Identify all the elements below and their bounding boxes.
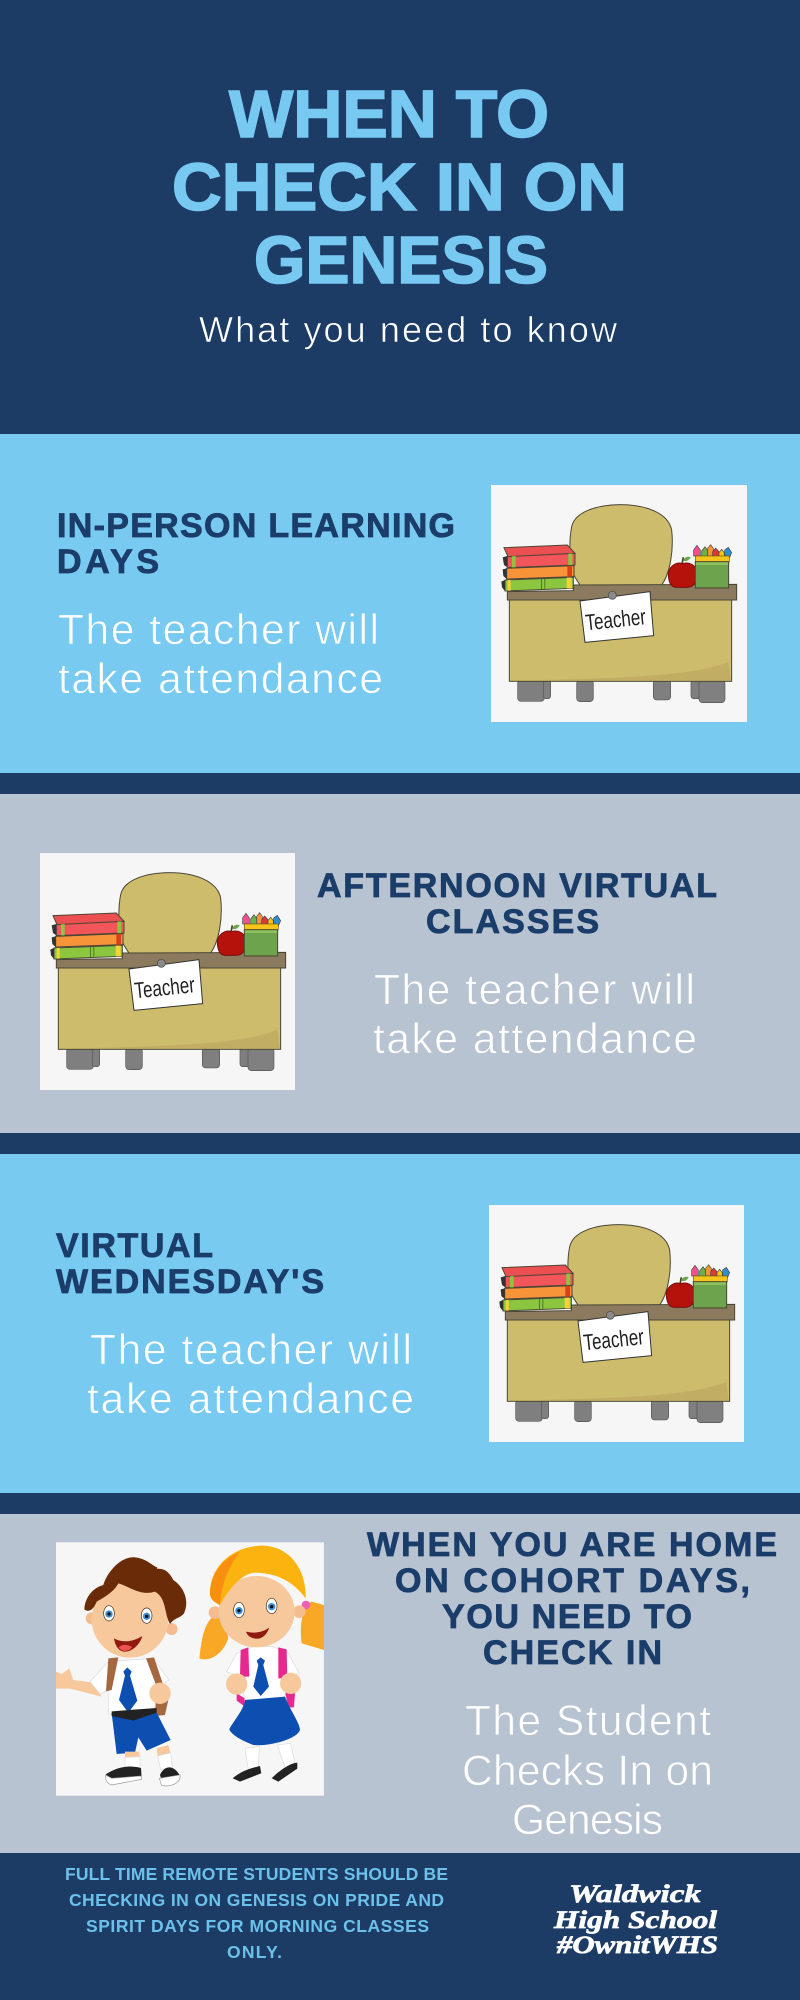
text: teacher takes attendance: take attendance [373,1016,697,1063]
heading: afternoon virtual classes: CLASSES [426,903,599,941]
heading: cohort days: YOU NEED TO [442,1598,692,1636]
heading: cohort days: ON COHORT DAYS, [395,1562,750,1600]
text: teacher takes attendance [373,967,697,1063]
title: WHEN TO [229,77,549,152]
heading: cohort days: CHECK IN [483,1634,662,1672]
heading: virtual wednesdays: WEDNESDAY'S [56,1263,324,1301]
heading: in-person learning days [57,507,455,581]
icon: two students [56,1542,324,1796]
text: teacher takes attendance [58,607,383,703]
divider band [0,1133,800,1154]
girl [199,1546,324,1782]
panel: afternoon virtual classes [0,794,800,1133]
note: full time remote students [65,1864,448,1962]
text: teacher takes attendance [87,1327,414,1423]
note: full time remote students: SPIRIT DAYS FOR MORNING CLASSES [86,1916,429,1936]
title [172,77,627,298]
title: GENESIS [254,223,548,298]
text: teacher takes attendance: The teacher will [58,607,379,654]
note: full time remote students: ONLY. [227,1942,282,1962]
school name and hashtag: #OwnitWHS [556,1932,718,1959]
icon: teacher desk: Teacher [584,603,647,635]
panel: footer [0,1853,800,2000]
text: student checks in: The Student [465,1698,711,1745]
icon: teacher desk: Teacher [133,971,196,1003]
text: teacher takes attendance: The teacher will [90,1327,412,1374]
heading: afternoon virtual classes [317,867,717,941]
text: student checks in: Genesis [512,1797,663,1844]
panel: in-person learning days [0,434,800,773]
heading: virtual wednesdays [56,1227,324,1301]
icon: teacher desk: Teacher [582,1323,645,1355]
divider band [0,773,800,794]
icon: teacher desk [40,853,295,1090]
divider band [0,1493,800,1514]
text: teacher takes attendance: The teacher will [374,967,695,1014]
heading: afternoon virtual classes: AFTERNOON VIRTUAL [317,867,717,905]
text: teacher takes attendance: take attendance [87,1376,414,1423]
school name and hashtag: High School [553,1907,717,1934]
subtitle: What you need to know [199,309,618,350]
heading: in-person learning days: IN-PERSON LEARNING [57,507,455,545]
panel: cohort days [0,1514,800,1853]
icon: teacher desk [491,485,747,722]
text: teacher takes attendance: take attendance [58,656,383,703]
heading: cohort days [367,1526,777,1672]
school name and hashtag: Waldwick [569,1881,702,1908]
boy [56,1557,186,1786]
text: student checks in [462,1698,713,1844]
note: full time remote students: CHECKING IN ON GENESIS ON PRIDE AND [69,1890,444,1910]
note: full time remote students: FULL TIME REMOTE STUDENTS SHOULD BE [65,1864,448,1884]
school name and hashtag [553,1881,718,1959]
panel: header [0,0,800,434]
text: student checks in: Checks In on [462,1748,713,1795]
heading: in-person learning days: DAYS [57,543,159,581]
title: CHECK IN ON [172,150,627,225]
panel: virtual wednesdays [0,1154,800,1493]
heading: virtual wednesdays: VIRTUAL [56,1227,213,1265]
heading: cohort days: WHEN YOU ARE HOME [367,1526,777,1564]
icon: teacher desk [489,1205,744,1442]
